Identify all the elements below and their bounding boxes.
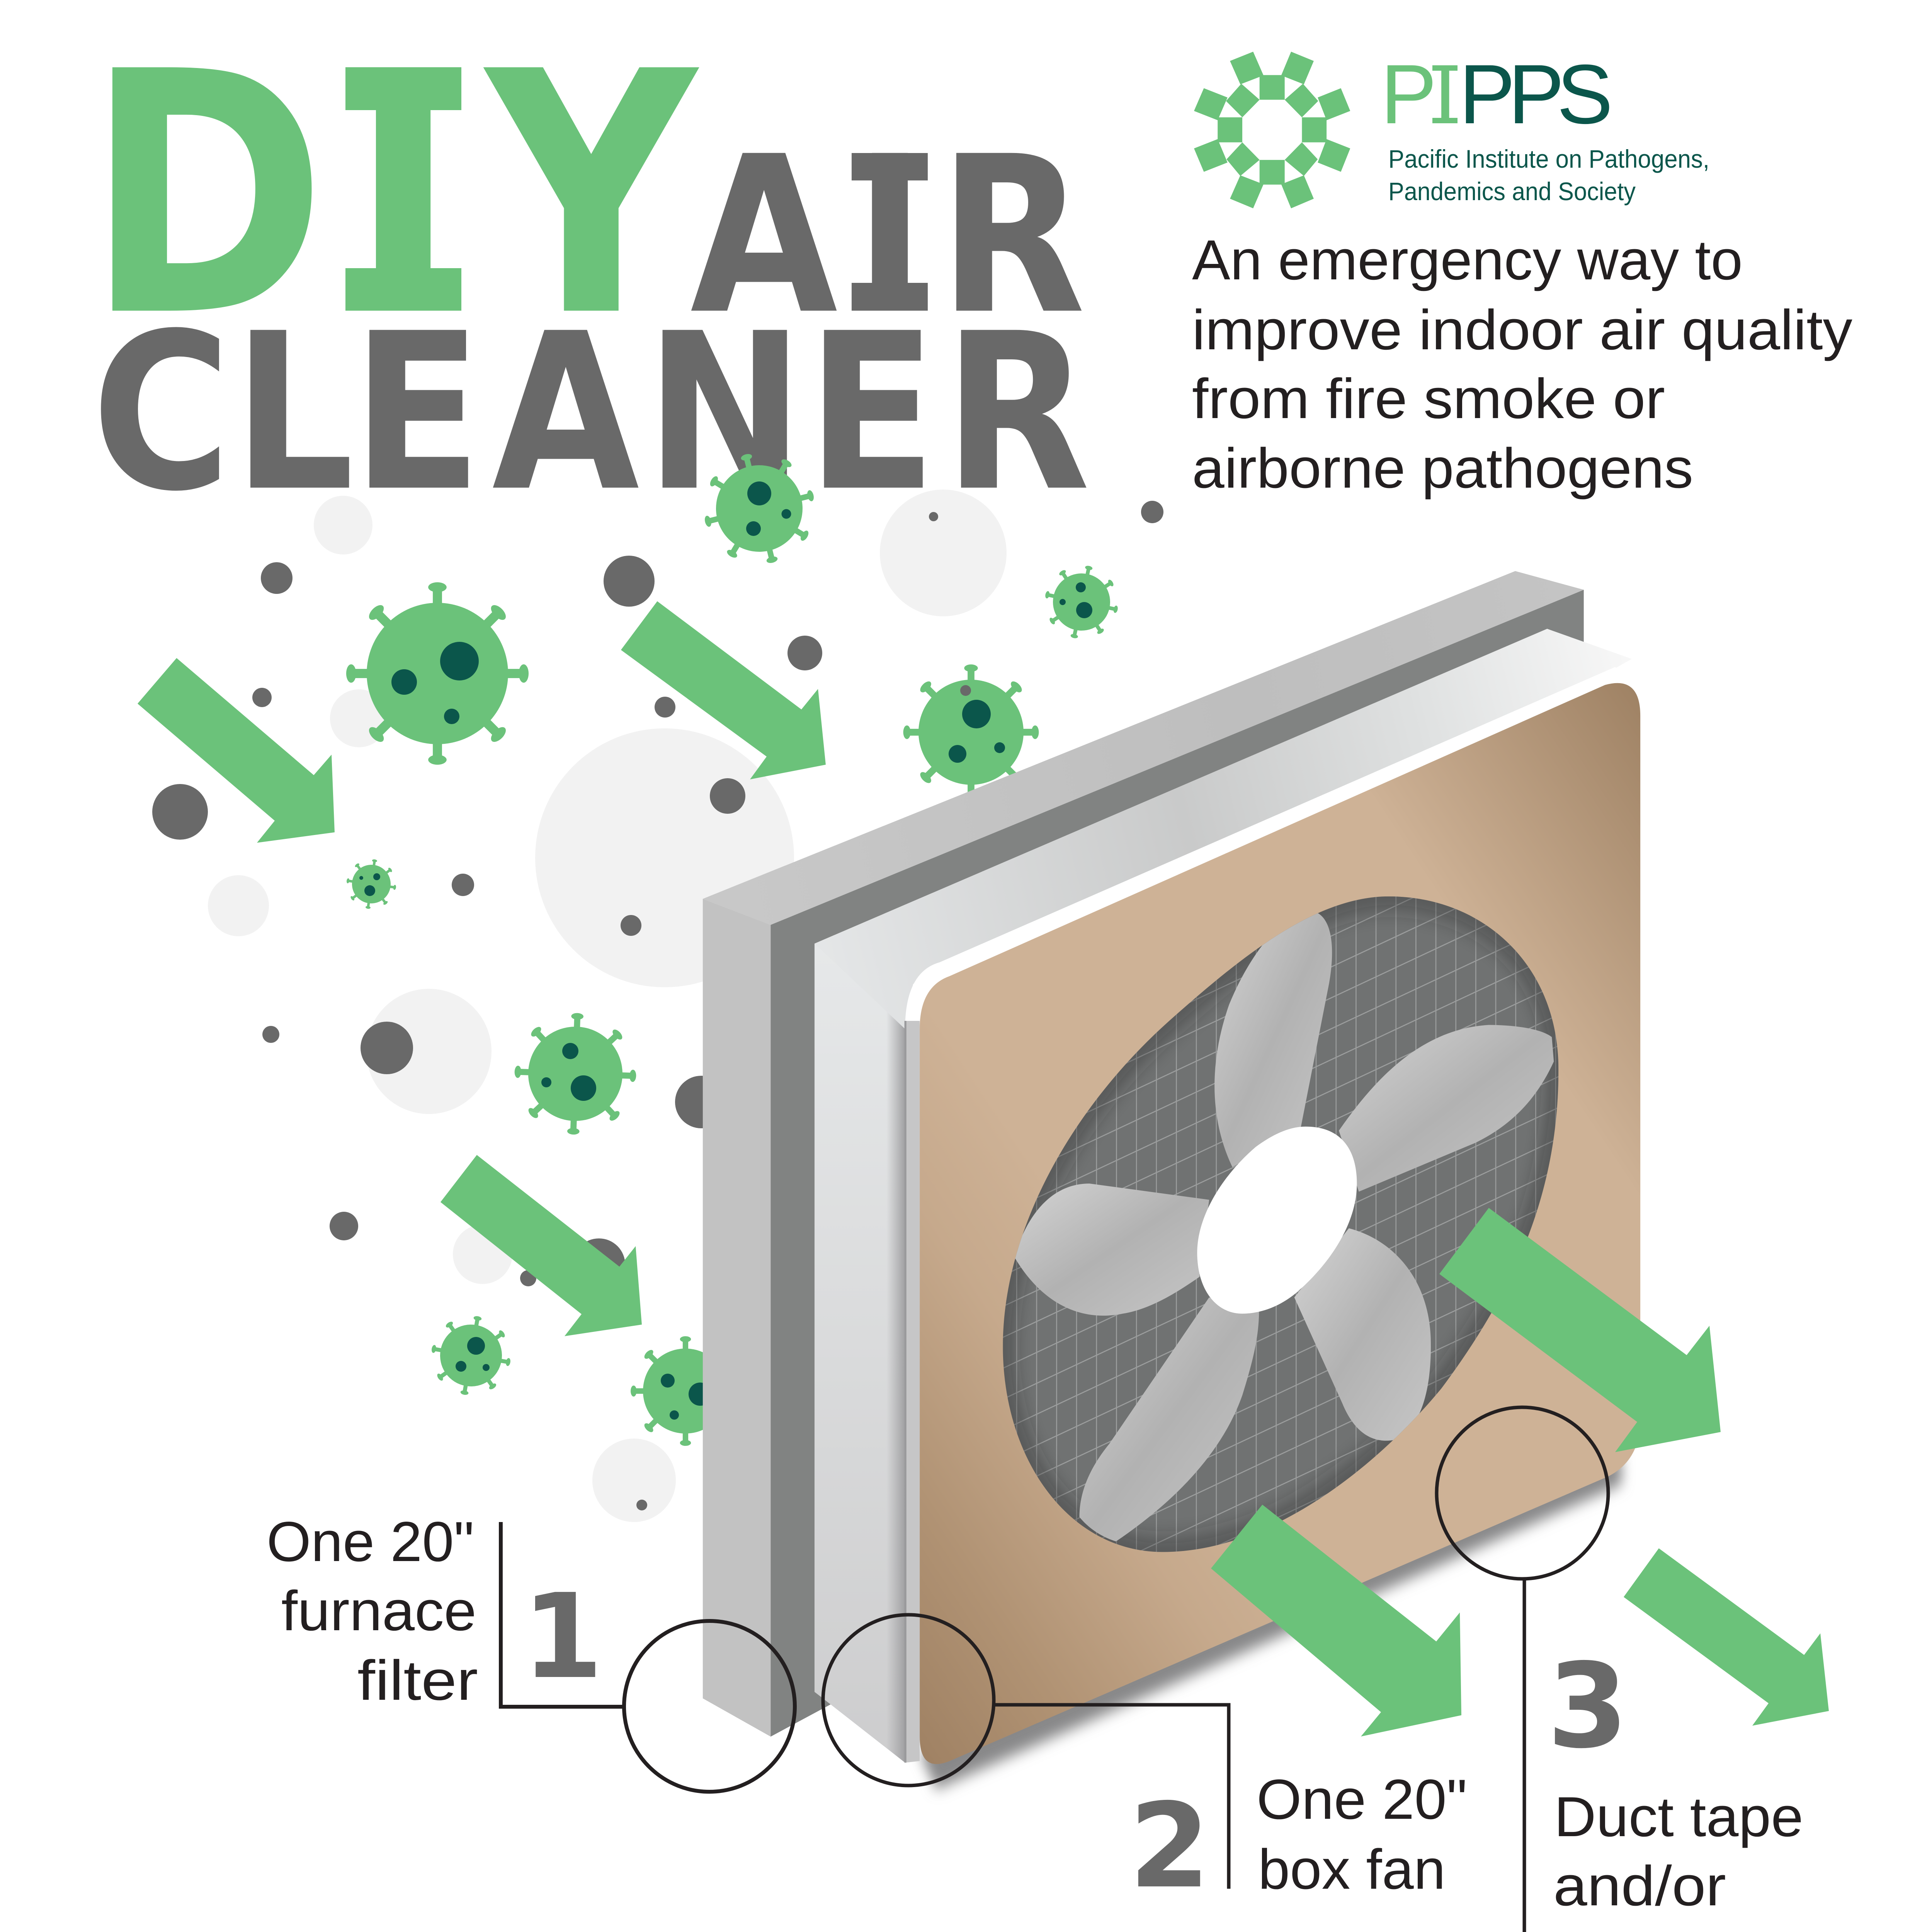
icon: virus 4 bbox=[1038, 558, 1125, 646]
label: furnace filter: One 20" bbox=[267, 1510, 474, 1573]
logo wordmark: PI bbox=[1381, 48, 1457, 141]
icon: virus 2 bbox=[692, 441, 827, 576]
icon: virus 1 bbox=[346, 582, 529, 765]
heading: AIR: AIR bbox=[690, 110, 1085, 362]
label: tape and cardboard bbox=[1553, 1785, 1818, 1932]
subtitle: improve indoor air quality bbox=[1192, 298, 1852, 361]
logo wordmark: PPS bbox=[1459, 48, 1613, 141]
subtitle bbox=[1192, 228, 1852, 500]
fan hub bbox=[1197, 1127, 1357, 1314]
logo mark bbox=[1194, 52, 1350, 208]
icon: virus 5 bbox=[343, 856, 400, 912]
illustration: filter and box fan bbox=[703, 571, 1640, 1789]
fan opening with blades bbox=[990, 883, 1575, 1566]
arrow: intake top bbox=[621, 601, 826, 779]
box fan housing bbox=[815, 629, 1638, 1789]
icon: virus 6 bbox=[512, 1011, 638, 1137]
subtitle: An emergency way to bbox=[1192, 228, 1743, 291]
arrow: outflow middle bbox=[1211, 1505, 1461, 1736]
label: box fan bbox=[1257, 1768, 1467, 1901]
subtitle: airborne pathogens bbox=[1192, 437, 1693, 500]
arrow: outflow lower bbox=[1624, 1548, 1829, 1726]
smoke particles: light bbox=[208, 490, 1007, 1522]
smoke particles: dark bbox=[152, 501, 1163, 1510]
subtitle: from fire smoke or bbox=[1192, 367, 1665, 430]
arrow: outflow upper bbox=[1439, 1208, 1721, 1452]
heading: CLEANER: CLEANER bbox=[92, 287, 1090, 539]
icon: virus 7 bbox=[425, 1309, 517, 1402]
label: box fan: One 20" bbox=[1257, 1768, 1467, 1831]
logo full name: Pandemics and Society bbox=[1388, 177, 1636, 206]
logo full name: Pacific Institute on Pathogens, bbox=[1388, 145, 1709, 173]
label: box fan: box fan bbox=[1258, 1838, 1446, 1901]
callout: tape and cardboard bbox=[1437, 1407, 1822, 1932]
furnace filter bbox=[703, 571, 1584, 1736]
logo wordmark bbox=[1381, 48, 1613, 141]
cardboard panel bbox=[920, 683, 1640, 1764]
fan blades bbox=[1014, 911, 1554, 1541]
title bbox=[86, 1, 1090, 539]
label: furnace filter bbox=[267, 1510, 478, 1712]
label: tape and cardboard: and/or bbox=[1553, 1854, 1726, 1917]
number 1: 1 bbox=[522, 1569, 603, 1705]
number 2: 2 bbox=[1129, 1779, 1210, 1914]
callout: furnace filter bbox=[501, 1522, 795, 1792]
arrow: intake upper left bbox=[138, 658, 335, 843]
callout: box fan bbox=[823, 1615, 1229, 1889]
label: furnace filter: furnace bbox=[281, 1579, 476, 1642]
PIPPS logo bbox=[1194, 48, 1709, 208]
label: furnace filter: filter bbox=[357, 1649, 478, 1712]
number 3: 3 bbox=[1547, 1639, 1628, 1774]
icon: virus 3 bbox=[903, 665, 1039, 800]
icon: virus 8 bbox=[631, 1336, 740, 1446]
logo full name bbox=[1388, 145, 1709, 206]
heading: DIY: DIY bbox=[86, 1, 699, 389]
label: tape and cardboard: Duct tape bbox=[1554, 1785, 1803, 1848]
arrow: intake lower bbox=[440, 1155, 642, 1336]
